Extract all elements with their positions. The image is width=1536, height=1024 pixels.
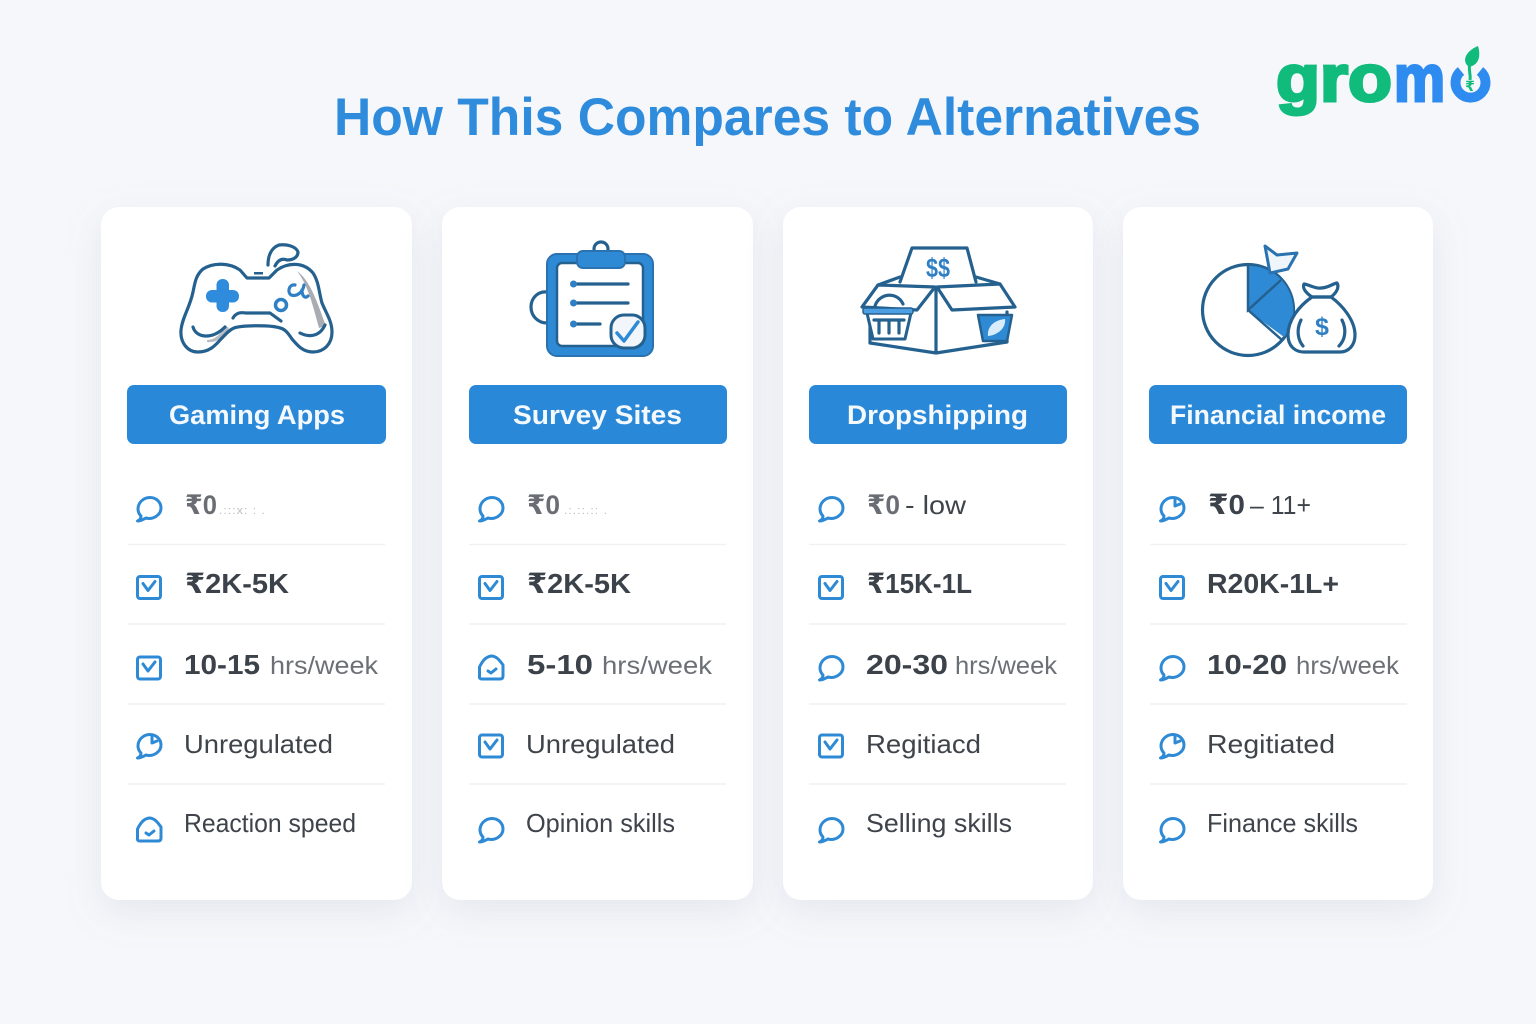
panel: financial income bbox=[1123, 207, 1433, 900]
row: hours: hrs/week bbox=[955, 652, 1057, 680]
row: cost bbox=[138, 490, 266, 521]
icon: game controller bbox=[181, 245, 332, 352]
row: hours: 5-10 bbox=[527, 649, 593, 680]
row: cost: – 11+ bbox=[1250, 490, 1311, 520]
heading button: financial income bbox=[1149, 385, 1407, 444]
icon: open box with baskets: $$ bbox=[926, 253, 950, 283]
row: cost bbox=[480, 490, 608, 521]
row: cost bbox=[820, 490, 966, 521]
row: hours: 10-20 bbox=[1207, 649, 1287, 680]
row: regulation: Regitiated bbox=[1207, 729, 1335, 759]
row: earnings: ₹2K-5K bbox=[527, 568, 631, 599]
row: hours: hrs/week bbox=[602, 652, 713, 680]
logo: gromo: gro bbox=[1276, 41, 1392, 115]
heading button: financial income: Financial income bbox=[1170, 400, 1386, 430]
panel: gaming apps bbox=[101, 207, 412, 900]
row: regulation bbox=[1160, 729, 1335, 759]
row: skill: Reaction speed bbox=[184, 808, 356, 838]
title: How This Compares to Alternatives bbox=[334, 88, 1201, 147]
panel: survey sites bbox=[442, 207, 753, 900]
row: skill bbox=[480, 808, 675, 842]
heading button: survey sites bbox=[469, 385, 727, 444]
icon: clipboard bbox=[531, 242, 653, 356]
card background: gaming apps bbox=[101, 207, 412, 900]
heading button: gaming apps bbox=[127, 385, 386, 444]
row: skill bbox=[137, 808, 356, 841]
row: cost: - low bbox=[905, 490, 966, 520]
row: cost: ₹0 bbox=[185, 490, 217, 520]
row: hours bbox=[138, 649, 379, 680]
heading button: gaming apps: Gaming Apps bbox=[169, 400, 345, 430]
icon: pie chart and money bag: $ bbox=[1315, 313, 1329, 341]
row: hours bbox=[479, 649, 713, 680]
icon: open box with baskets bbox=[862, 248, 1015, 353]
row: earnings bbox=[138, 568, 289, 599]
row: skill: Finance skills bbox=[1207, 808, 1358, 838]
row: regulation: Regitiacd bbox=[866, 729, 981, 759]
row: cost: .:::x: : . bbox=[219, 505, 266, 517]
row: hours: hrs/week bbox=[270, 652, 379, 680]
row: cost: ₹0 bbox=[867, 490, 900, 520]
card background: financial income bbox=[1123, 207, 1433, 900]
row: hours: 20-30 bbox=[866, 649, 948, 680]
row: skill bbox=[820, 808, 1012, 842]
row: earnings: ₹15K-1L bbox=[867, 568, 972, 599]
logo: gromo: ₹ bbox=[1465, 78, 1475, 94]
row: earnings: R20K-1L+ bbox=[1207, 568, 1339, 599]
icon: pie chart and money bag bbox=[1202, 246, 1355, 356]
heading button: dropshipping: Dropshipping bbox=[847, 400, 1028, 430]
row: hours: 10-15 bbox=[184, 649, 260, 680]
row: cost: .:.::.:: . bbox=[564, 505, 608, 517]
row: regulation bbox=[820, 729, 981, 759]
row: hours bbox=[1160, 649, 1400, 680]
card background: survey sites bbox=[442, 207, 753, 900]
row: hours: hrs/week bbox=[1296, 652, 1400, 680]
logo: gromo: m bbox=[1394, 41, 1445, 115]
heading button: survey sites: Survey Sites bbox=[513, 400, 682, 430]
logo: gromo bbox=[1276, 41, 1486, 115]
row: skill bbox=[1160, 808, 1358, 842]
row: regulation: Unregulated bbox=[184, 729, 333, 759]
panel: dropshipping bbox=[783, 207, 1093, 900]
row: regulation: Unregulated bbox=[526, 729, 675, 759]
row: skill: Selling skills bbox=[866, 808, 1012, 838]
row: earnings: ₹2K-5K bbox=[185, 568, 289, 599]
heading button: dropshipping bbox=[809, 385, 1067, 444]
row: hours bbox=[820, 649, 1057, 680]
row: cost bbox=[1160, 489, 1311, 521]
row: cost: ₹0 bbox=[527, 490, 560, 520]
row: skill: Opinion skills bbox=[526, 808, 675, 838]
row: earnings bbox=[820, 568, 972, 599]
row: cost: ₹0 bbox=[1208, 489, 1245, 520]
row: earnings bbox=[480, 568, 631, 599]
card background: dropshipping bbox=[783, 207, 1093, 900]
